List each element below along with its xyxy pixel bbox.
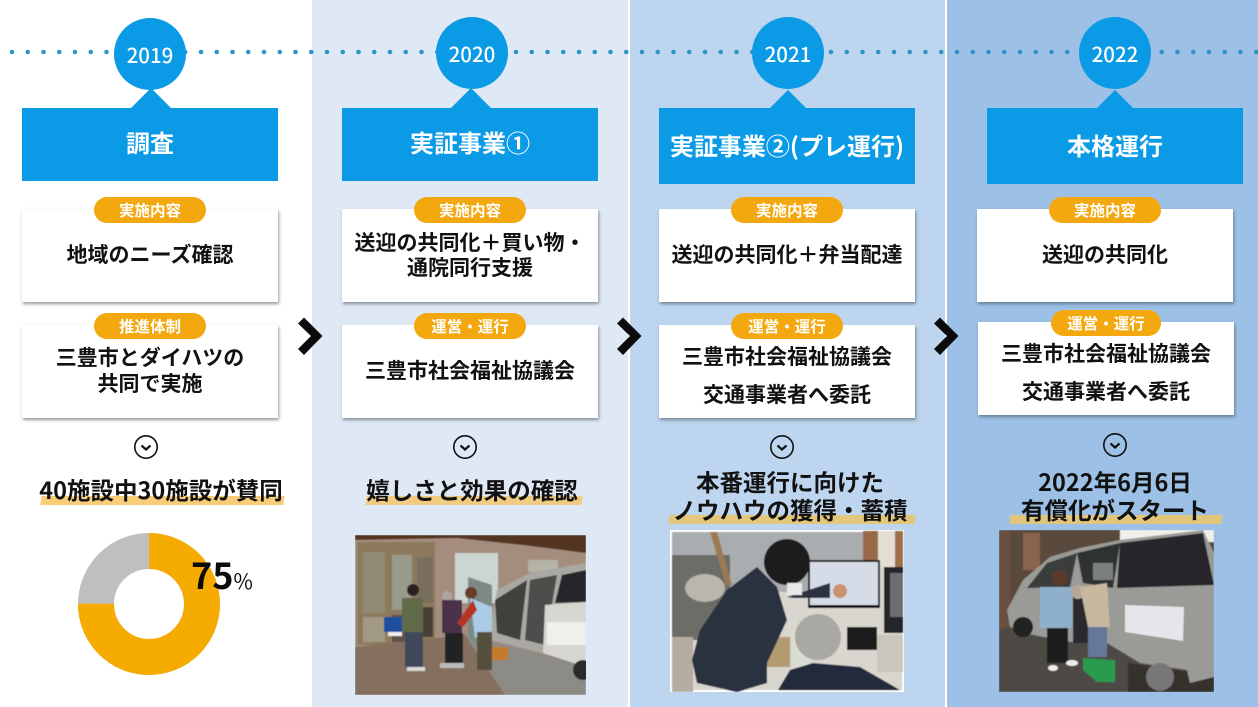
card: 実施内容 (342, 209, 598, 302)
badge pointer (1095, 90, 1135, 110)
tag: 運営・運行: 運営・運行 (431, 315, 509, 337)
card: 実施内容: 送迎の共同化 (1042, 239, 1168, 269)
tag: 運営・運行: 運営・運行 (1067, 312, 1145, 334)
highlight underline (365, 496, 583, 505)
tag: 実施内容: 実施内容 (756, 199, 818, 221)
result heading: 嬉しさと効果の確認 (366, 472, 578, 506)
card: 実施内容: 送迎の共同化＋弁当配達 (672, 239, 902, 269)
tag: 実施内容: 実施内容 (1074, 199, 1136, 221)
badge pointer (131, 88, 171, 108)
year badge 2020: 2020 (449, 38, 495, 68)
photo: map review on monitor (670, 530, 904, 692)
panel: 2019 (21, 18, 285, 675)
result heading: 2022年6月6日 (1038, 464, 1192, 498)
icon: chevron circle (134, 435, 158, 459)
card: 実施内容 (659, 209, 915, 302)
panel: 2020 (341, 17, 601, 695)
icon: chevron circle (453, 435, 477, 459)
card: 推進体制 (22, 325, 278, 418)
year badge 2021 (752, 17, 824, 89)
result heading: ノウハウの獲得・蓄積 (672, 492, 908, 526)
heading: 調査: 調査 (126, 124, 174, 159)
donut chart 75% (78, 533, 220, 675)
card: 実施内容: 地域のニーズ確認 (67, 239, 233, 269)
card: 運営・運行: 三豊市社会福祉協議会 (682, 341, 892, 371)
tag: 推進体制: 推進体制 (119, 315, 181, 337)
tag: 実施内容: 実施内容 (119, 199, 181, 221)
heading: 本格運行 (987, 108, 1243, 184)
tag: 実施内容 (731, 197, 843, 223)
year badge 2022: 2022 (1092, 38, 1138, 68)
heading: 実証事業①: 実証事業① (410, 124, 530, 159)
background band 2022 (947, 0, 1258, 707)
tag: 運営・運行: 運営・運行 (748, 315, 826, 337)
highlight underline (668, 515, 916, 524)
year badge 2021: 2021 (765, 38, 811, 68)
arrow 3 (934, 318, 958, 355)
card: 推進体制: 共同で実施 (98, 368, 202, 398)
card: 推進体制: 三豊市とダイハツの (56, 342, 244, 372)
heading: 実証事業②(プレ運行) (659, 108, 915, 184)
badge pointer (768, 90, 808, 110)
card: 実施内容: 通院同行支援 (407, 252, 533, 282)
year badge 2019 (114, 18, 186, 90)
result heading: 本番運行に向けた (696, 464, 884, 498)
heading: 実証事業②(プレ運行): 実証事業②(プレ運行) (670, 127, 904, 162)
result heading: 40施設中30施設が賛同 (39, 472, 283, 506)
heading: 調査 (22, 108, 278, 181)
heading: 実証事業① (342, 108, 598, 181)
result heading (672, 464, 908, 526)
year badge 2020 (436, 17, 508, 89)
card: 運営・運行: 交通事業者へ委託 (703, 379, 871, 409)
heading: 本格運行: 本格運行 (1067, 127, 1163, 162)
tag: 実施内容 (1049, 197, 1161, 223)
card: 運営・運行 (978, 322, 1234, 415)
year badge 2019: 2019 (127, 39, 173, 69)
year badge 2022 (1079, 17, 1151, 89)
tag: 運営・運行 (414, 313, 526, 339)
card: 実施内容 (22, 209, 278, 302)
background band 2020 (312, 0, 628, 707)
donut value: 75% (191, 548, 253, 600)
background band 2021 (630, 0, 945, 707)
tag: 推進体制 (94, 313, 206, 339)
card: 実施内容: 送迎の共同化＋買い物・ (354, 227, 586, 257)
badge pointer (451, 88, 491, 108)
tag: 実施内容 (414, 197, 526, 223)
photo: passengers at van (355, 535, 586, 695)
tag: 実施内容: 実施内容 (439, 199, 501, 221)
result heading (1021, 464, 1209, 526)
card: 実施内容 (977, 209, 1233, 302)
card: 運営・運行: 交通事業者へ委託 (1022, 376, 1190, 406)
icon: chevron circle (770, 435, 794, 459)
photo: boarding the van (999, 530, 1214, 692)
panel: 2022 (976, 17, 1243, 692)
icon: chevron circle (1103, 433, 1127, 457)
tag: 運営・運行 (1051, 310, 1161, 336)
tag: 運営・運行 (731, 313, 843, 339)
card: 運営・運行: 三豊市社会福祉協議会 (365, 355, 575, 385)
card: 運営・運行: 三豊市社会福祉協議会 (1001, 338, 1211, 368)
highlight underline (1009, 515, 1223, 524)
dotted timeline (10, 50, 1258, 54)
highlight underline (40, 496, 285, 505)
tag: 実施内容 (94, 197, 206, 223)
result heading: 有償化がスタート (1021, 492, 1209, 526)
arrow 2 (617, 318, 642, 355)
arrow 1 (298, 318, 322, 355)
card: 運営・運行 (342, 325, 598, 418)
panel: 2021 (658, 17, 918, 692)
card: 運営・運行 (659, 325, 915, 418)
